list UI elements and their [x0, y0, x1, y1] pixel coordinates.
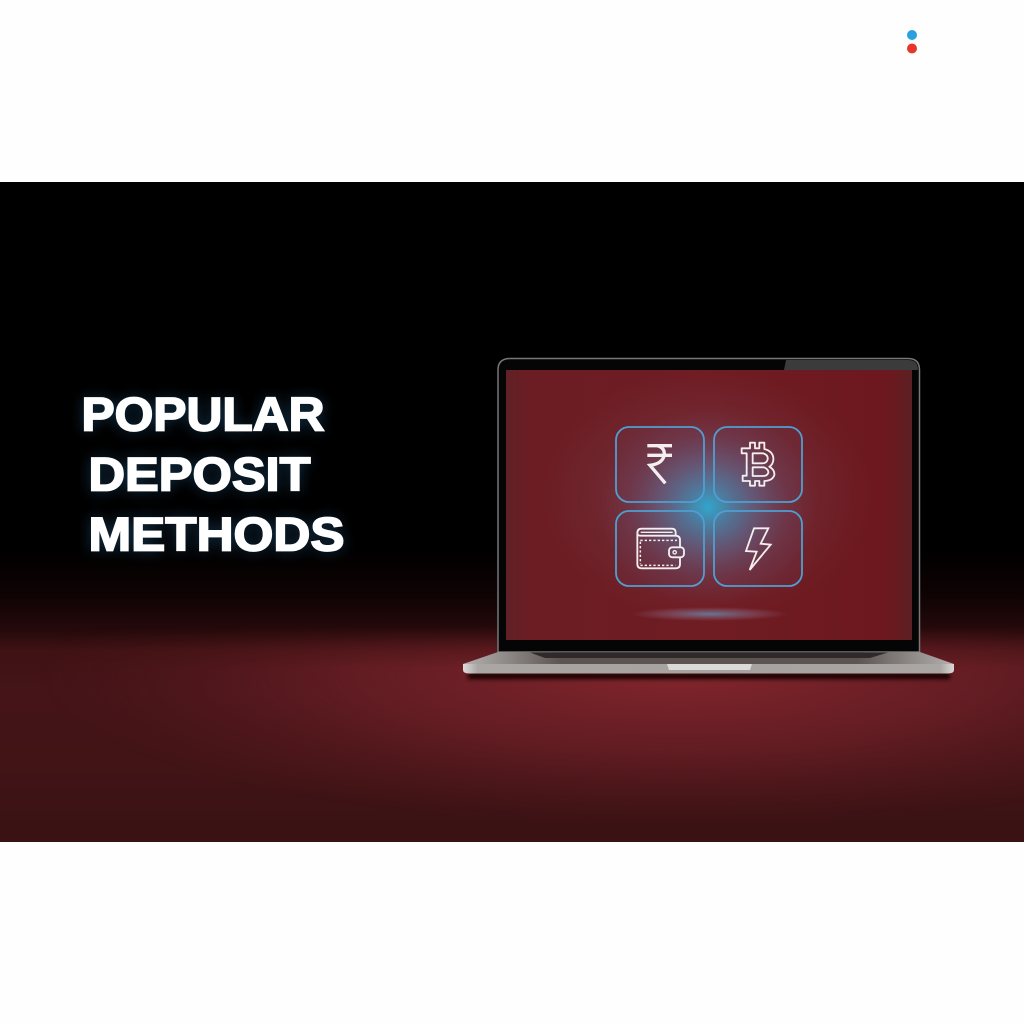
laptop	[463, 358, 954, 679]
title: popular deposit methods: POPULAR	[82, 388, 324, 440]
central blue glow	[600, 409, 816, 605]
reflection under icons	[632, 607, 788, 621]
icon: wallet	[637, 529, 684, 568]
laptop shadow on floor	[468, 673, 950, 679]
title: popular deposit methods	[81, 388, 345, 561]
icon: lightning bolt	[746, 528, 771, 570]
icon: bitcoin	[742, 443, 774, 486]
infographic canvas	[0, 30, 1024, 842]
title: popular deposit methods: DEPOSIT	[88, 448, 311, 500]
screen halo	[541, 370, 871, 620]
title: popular deposit methods: METHODS	[88, 508, 345, 561]
lid reflection	[784, 360, 918, 370]
title: popular deposit methods: POPULAR	[81, 388, 325, 441]
title: popular deposit methods: METHODS	[88, 508, 344, 560]
status dots	[907, 30, 917, 54]
icon: rupee	[647, 446, 672, 483]
laptop lid and bezel	[498, 358, 920, 652]
icon cards	[616, 427, 802, 586]
title: popular deposit methods: DEPOSIT	[88, 448, 311, 501]
laptop base	[463, 652, 954, 674]
laptop screen	[506, 370, 912, 640]
dark banner with red floor	[0, 182, 1024, 842]
